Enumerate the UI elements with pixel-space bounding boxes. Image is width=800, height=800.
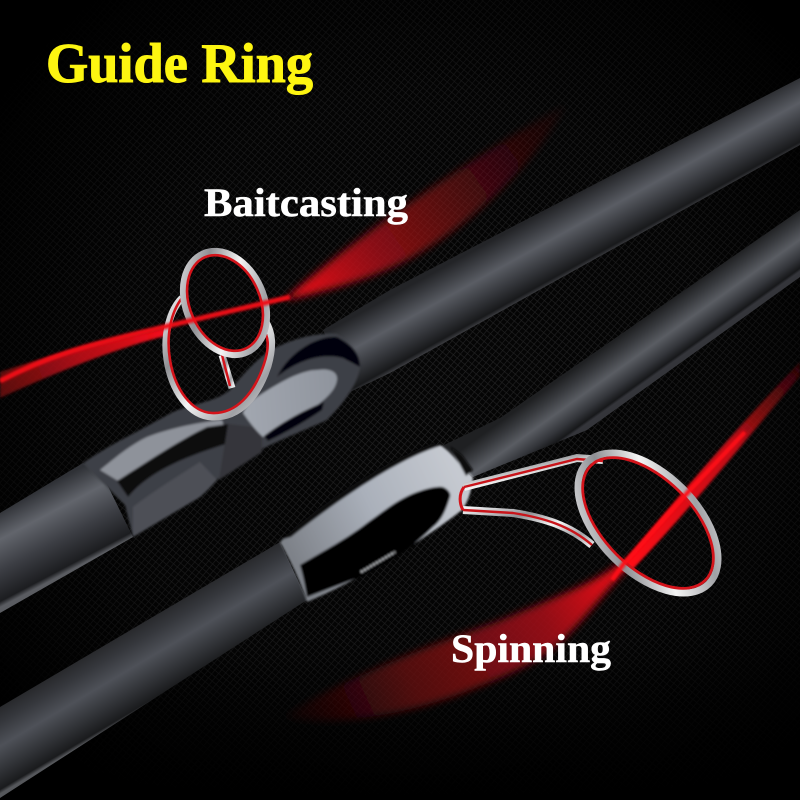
lower rod glossy wrap	[280, 443, 473, 602]
red line through spinning guide	[612, 432, 745, 580]
guide foot loop	[166, 298, 272, 417]
lower rod	[0, 210, 800, 798]
red glow streaks	[0, 105, 800, 721]
label: Baitcasting: Baitcasting	[204, 180, 408, 225]
label: Spinning: Spinning	[451, 626, 611, 671]
upper rod glossy wrap	[83, 334, 360, 537]
spinning guide	[460, 428, 743, 618]
baitcasting guide	[166, 238, 283, 417]
spinning ring	[553, 428, 743, 618]
frame arms	[460, 458, 603, 545]
red line through baitcasting guide	[0, 297, 290, 381]
big ring	[167, 238, 283, 368]
title: Guide Ring	[46, 33, 313, 95]
upper rod	[0, 78, 800, 613]
